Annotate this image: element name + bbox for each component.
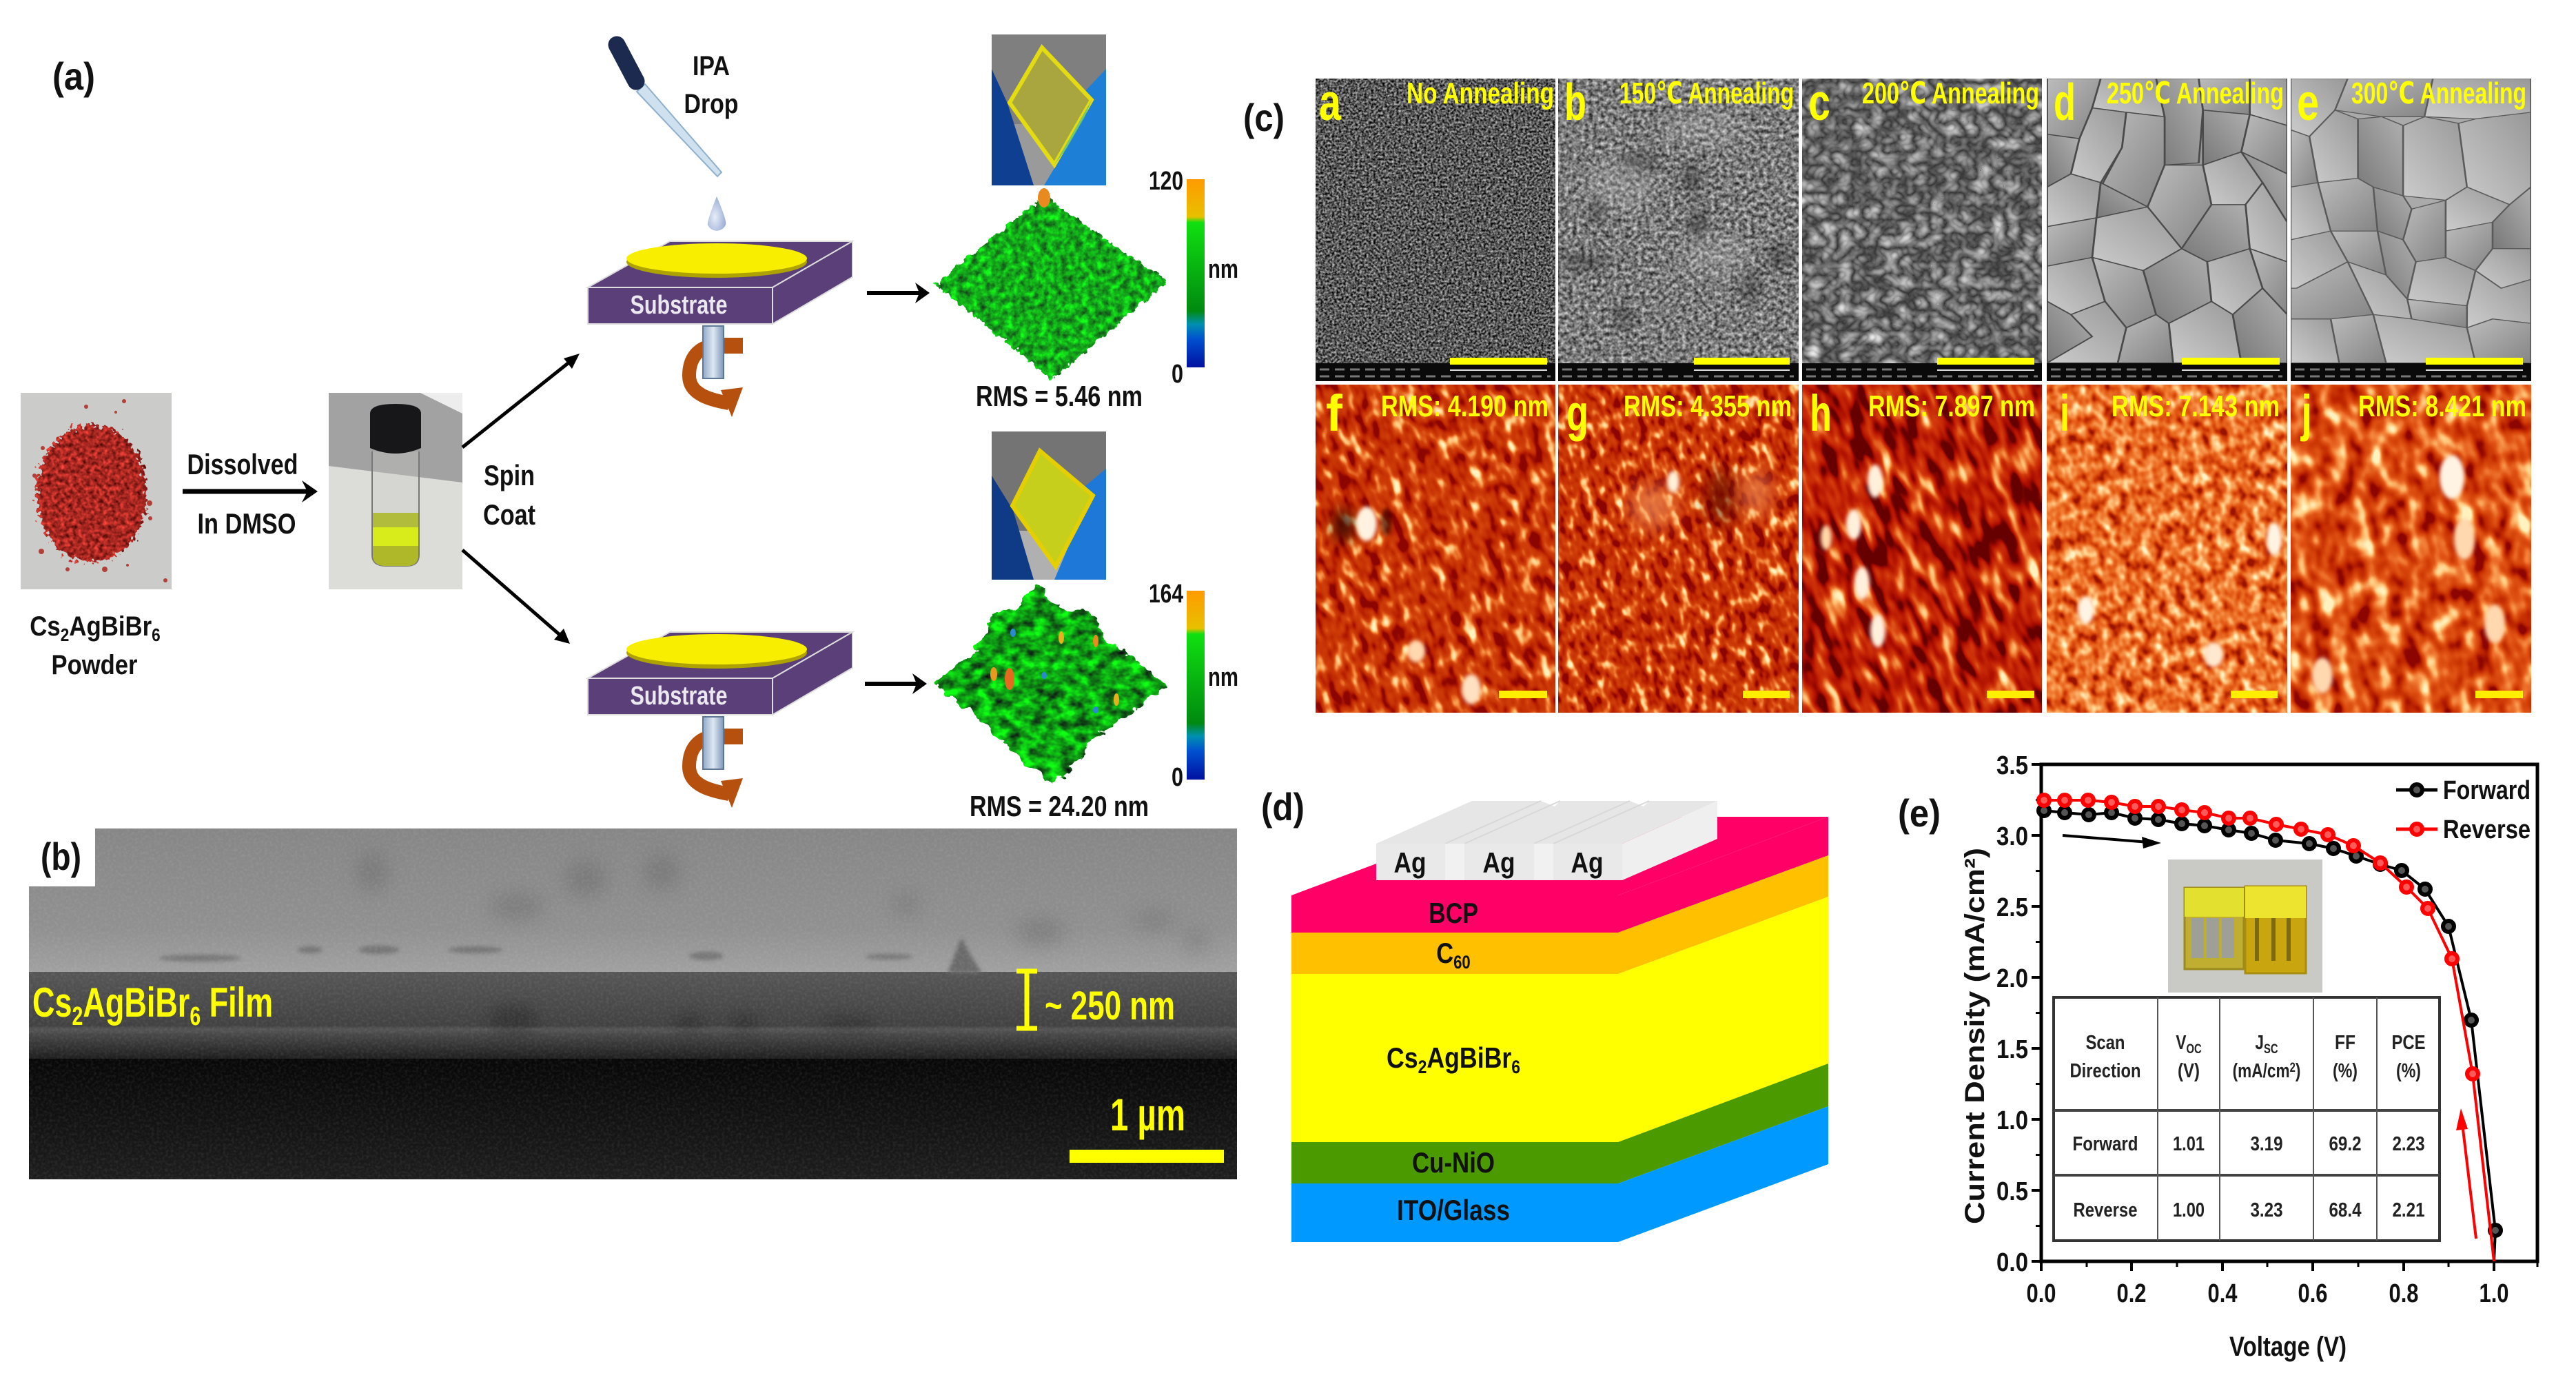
- scale bar: [1070, 1089, 1224, 1163]
- icon: IPA dropper: [617, 45, 726, 231]
- film label: 2: [72, 1002, 83, 1031]
- parameters table: ): [2296, 1059, 2300, 1082]
- colour scale top: 0: [1172, 360, 1183, 389]
- Ag electrodes: Ag: [1393, 846, 1427, 879]
- colour scale bottom: nm: [1208, 663, 1238, 692]
- film label: Cs: [32, 980, 72, 1026]
- colour scale bottom: [1149, 580, 1238, 792]
- side faces of layers: [1618, 817, 1828, 1242]
- parameters table: (mA/cm: [2233, 1059, 2290, 1082]
- IPA drop label: [684, 51, 739, 119]
- panel label c: (c): [1243, 96, 1285, 139]
- colour scale bottom: 0: [1172, 763, 1183, 792]
- y axis tick labels: 0.0: [1996, 1248, 2028, 1277]
- AFM surface 3D bottom: [935, 584, 1167, 787]
- photo: film on glove, top: [992, 34, 1106, 185]
- y axis tick labels: 0.5: [1996, 1177, 2028, 1206]
- colour scale top: 120: [1149, 167, 1183, 196]
- SEM d 250C: [2047, 73, 2287, 381]
- RMS label bottom: RMS = 24.20 nm: [970, 790, 1149, 822]
- layer perovskite: 6: [1511, 1057, 1520, 1077]
- x axis tick labels: 0.6: [2298, 1279, 2328, 1308]
- parameters table: 3.19: [2251, 1133, 2282, 1155]
- arrow: dissolved in DMSO: Dissolved: [187, 448, 298, 480]
- layer perovskite: [1291, 974, 1618, 1142]
- layer BCP: BCP: [1429, 897, 1478, 929]
- layer perovskite: 2: [1418, 1057, 1427, 1077]
- layer C60: [1291, 933, 1618, 974]
- powder caption: [30, 611, 161, 680]
- parameters table: 69.2: [2329, 1133, 2361, 1155]
- y axis tick labels: 2.5: [1996, 893, 2028, 922]
- AFM h: RMS: 7.897 nm: [1868, 389, 2035, 423]
- parameters table: 3.23: [2251, 1199, 2282, 1221]
- layer ITO glass: ITO/Glass: [1397, 1194, 1510, 1226]
- arrow: dissolved in DMSO: [183, 448, 318, 540]
- colour scale top: [1149, 167, 1238, 389]
- AFM i: RMS: 7.143 nm: [2112, 389, 2280, 423]
- panel c: AFM image row: [1316, 385, 2531, 713]
- SEM e 300C: e: [2297, 73, 2319, 131]
- layer ITO glass: [1291, 1183, 1618, 1242]
- x axis tick labels: 0.2: [2117, 1279, 2146, 1308]
- device photo inset: [2168, 860, 2322, 993]
- powder caption: 6: [152, 626, 161, 645]
- layer Cu-NiO: Cu-NiO: [1412, 1146, 1495, 1179]
- AFM i: [1890, 261, 2447, 842]
- colour scale top: nm: [1208, 255, 1238, 284]
- SEM b 150C: [1557, 73, 1799, 381]
- top face BCP: [1291, 817, 1828, 895]
- x axis title: Voltage (V): [2229, 1332, 2347, 1362]
- AFM f: f: [1326, 385, 1342, 442]
- parameters table: 1.00: [2173, 1199, 2205, 1221]
- arrow to AFM top: [867, 283, 930, 303]
- SEM c 200C: 200℃ Annealing: [1862, 77, 2039, 110]
- panel c: SEM image row: [1316, 73, 2531, 381]
- film label: Film: [201, 980, 273, 1026]
- SEM a no annealing: a: [1319, 73, 1342, 131]
- film label: AgBiBr: [83, 980, 190, 1026]
- parameters table: Reverse: [2073, 1199, 2138, 1221]
- parameters table: Scan: [2085, 1032, 2125, 1054]
- layer perovskite: AgBiBr: [1427, 1042, 1511, 1075]
- SEM c 200C: [1802, 73, 2042, 381]
- x axis tick labels: 0.4: [2208, 1279, 2237, 1308]
- AFM g: g: [1566, 385, 1588, 442]
- y axis tick labels: 1.5: [1996, 1035, 2028, 1064]
- substrate without IPA drop: Substrate: [630, 682, 728, 711]
- arrow: forward scan direction: [2063, 835, 2161, 848]
- AFM f: [1316, 385, 1555, 713]
- substrate with IPA drop: [588, 241, 852, 417]
- spin coat label: [483, 459, 535, 531]
- panel d: device stack: [1261, 785, 1828, 1242]
- parameters table: (V): [2178, 1060, 2200, 1082]
- panel label b: [29, 828, 95, 886]
- Ag electrodes: Ag: [1571, 846, 1603, 879]
- panel a: film fabrication schematic: [21, 34, 1238, 822]
- x axis tick labels: [2026, 1279, 2508, 1308]
- SEM d 250C: 250℃ Annealing: [2107, 77, 2284, 110]
- Ag electrodes: [1376, 801, 1717, 880]
- Ag electrodes: Ag: [1483, 846, 1515, 879]
- SEM b 150C: 150℃ Annealing: [1619, 77, 1794, 110]
- AFM j: RMS: 8.421 nm: [2358, 389, 2526, 423]
- parameters table: SC: [2264, 1041, 2278, 1056]
- film label: [32, 980, 273, 1031]
- legend: Reverse: [2443, 815, 2531, 844]
- SEM e 300C: [2291, 73, 2531, 381]
- parameters table: PCE: [2391, 1032, 2426, 1054]
- x axis tick labels: 0.0: [2026, 1279, 2056, 1308]
- photo: vial with yellow solution: [329, 393, 462, 589]
- AFM h: [1802, 385, 2042, 713]
- axes frame and ticks: [2032, 764, 2537, 1271]
- y axis tick labels: 3.0: [1996, 822, 2028, 851]
- powder caption: AgBiBr: [69, 611, 152, 642]
- thickness marker: [1016, 971, 1175, 1028]
- SEM d 250C: d: [2054, 73, 2076, 131]
- parameters table: 68.4: [2329, 1199, 2361, 1221]
- parameters table: J: [2255, 1030, 2264, 1054]
- layer BCP: [1291, 895, 1618, 933]
- substrate with IPA drop: Substrate: [630, 291, 728, 320]
- x axis tick labels: 1.0: [2480, 1279, 2508, 1308]
- panel label d: (d): [1261, 785, 1305, 828]
- forward curve: [2038, 805, 2501, 1261]
- arrow: spin coat down branch: [462, 550, 570, 644]
- parameters table: (%): [2396, 1060, 2421, 1082]
- colour scale bottom: 164: [1149, 580, 1183, 609]
- legend: [2396, 776, 2531, 844]
- y axis tick labels: 1.0: [1996, 1106, 2028, 1135]
- layer C60: 60: [1453, 953, 1471, 973]
- arrow: dissolved in DMSO: In DMSO: [197, 507, 296, 540]
- panel b: cross-section SEM: [29, 828, 1237, 1179]
- arrow: reverse scan direction: [2456, 1108, 2476, 1239]
- AFM j: [2134, 260, 2576, 842]
- photo: film on glove, bottom: [992, 431, 1106, 580]
- AFM h: h: [1810, 385, 1832, 442]
- layer Cu-NiO: [1291, 1142, 1618, 1183]
- arrow to AFM bottom: [865, 673, 927, 694]
- powder caption: Powder: [51, 650, 138, 680]
- y axis tick labels: 2.0: [1996, 964, 2028, 993]
- SEM a no annealing: No Annealing: [1407, 77, 1554, 110]
- powder caption: 2: [61, 626, 69, 645]
- arrow: spin coat up branch: [462, 354, 580, 447]
- y axis tick labels: 3.5: [1996, 751, 2028, 780]
- RMS label top: RMS = 5.46 nm: [976, 380, 1143, 412]
- AFM g: RMS: 4.355 nm: [1624, 389, 1792, 423]
- panel label a: (a): [52, 54, 95, 98]
- parameters table: Direction: [2070, 1060, 2140, 1082]
- SEM b 150C: b: [1564, 73, 1586, 131]
- substrate without IPA drop: [588, 632, 852, 808]
- photo: red Cs2AgBiBr6 powder: [21, 393, 172, 589]
- y axis title: Current Density (mA/cm²): [1960, 848, 1990, 1224]
- AFM surface 3D top: [935, 188, 1167, 379]
- powder caption: Cs: [30, 611, 61, 642]
- parameters table: 1.01: [2173, 1133, 2205, 1155]
- parameters table: [2054, 997, 2440, 1241]
- panel label e: (e): [1898, 791, 1941, 835]
- parameters table: 2.23: [2393, 1133, 2424, 1155]
- film label: 6: [190, 1002, 201, 1031]
- spin coat label: Coat: [483, 498, 535, 531]
- x axis tick labels: 0.8: [2389, 1279, 2419, 1308]
- AFM f: RMS: 4.190 nm: [1381, 389, 1548, 423]
- SEM c 200C: c: [1808, 73, 1830, 131]
- scale bar: 1 µm: [1110, 1089, 1185, 1140]
- panel label b: (b): [41, 835, 81, 878]
- layer C60: C: [1436, 937, 1453, 970]
- parameters table: V: [2176, 1030, 2186, 1054]
- AFM g: [1558, 385, 1799, 713]
- SEM a no annealing: [1316, 73, 1555, 381]
- IPA drop label: IPA: [693, 51, 730, 81]
- AFM j: j: [2300, 385, 2312, 442]
- parameters table: (%): [2333, 1060, 2358, 1082]
- spin coat label: Spin: [484, 459, 535, 491]
- parameters table: Forward: [2073, 1133, 2138, 1155]
- parameters table: 2: [2290, 1060, 2296, 1075]
- parameters table: 2.21: [2393, 1199, 2424, 1221]
- AFM i: i: [2060, 385, 2069, 442]
- legend: Forward: [2443, 776, 2531, 805]
- IPA drop label: Drop: [684, 89, 739, 119]
- panel e: J-V chart: [1898, 751, 2537, 1362]
- SEM image: [29, 828, 1237, 1179]
- parameters table: FF: [2335, 1032, 2355, 1054]
- thickness marker: ~ 250 nm: [1045, 984, 1175, 1028]
- layer perovskite: Cs: [1387, 1042, 1418, 1075]
- y axis tick labels: [1996, 751, 2028, 1277]
- parameters table: OC: [2186, 1041, 2202, 1056]
- reverse curve: [2038, 795, 2494, 1261]
